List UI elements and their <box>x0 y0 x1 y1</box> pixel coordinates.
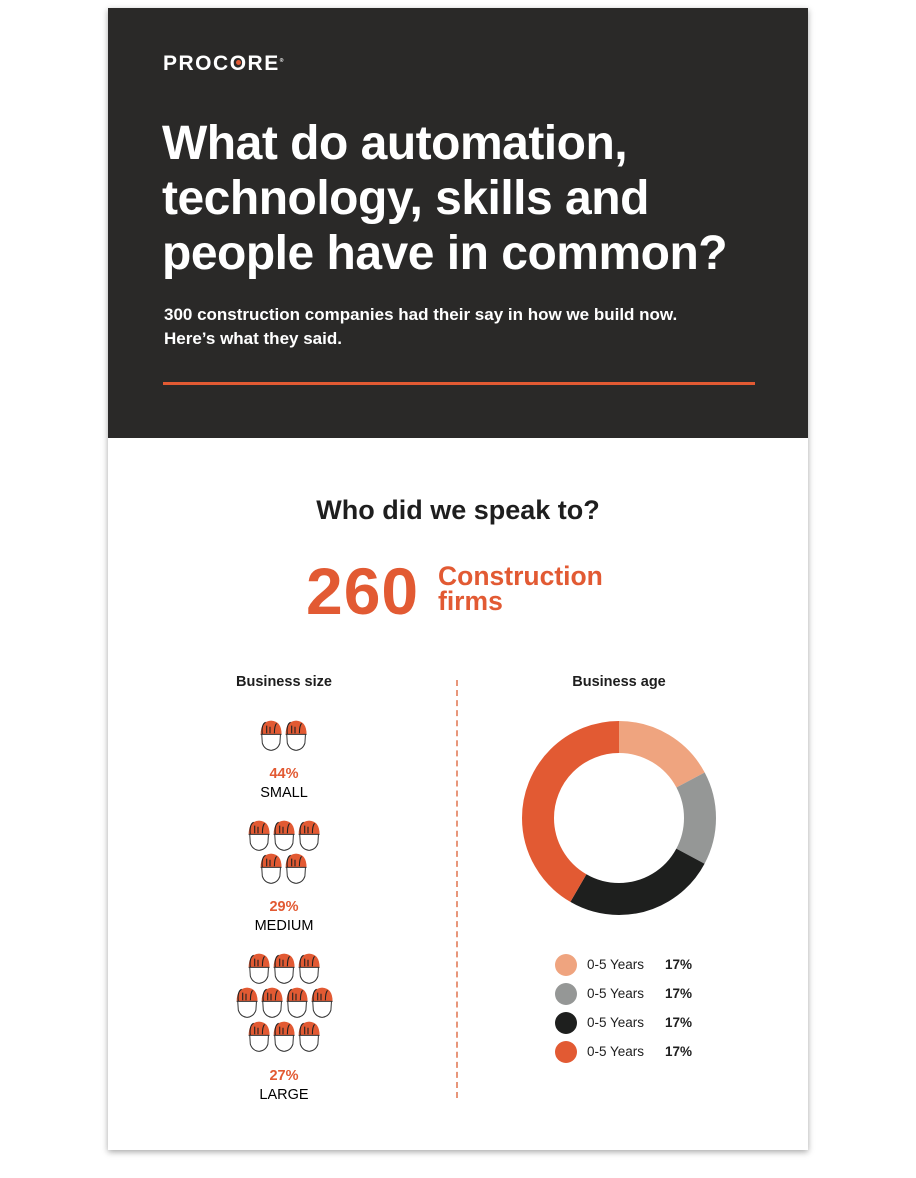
donut chart <box>522 721 716 915</box>
legend: 17% <box>665 1044 692 1059</box>
header panel <box>108 8 808 438</box>
divider <box>163 382 755 385</box>
panel: business size: LARGE <box>259 1087 309 1103</box>
legend: 17% <box>665 957 692 972</box>
title: What do automation, technology, skills and people have in common? <box>162 117 727 280</box>
logo: PROCORE® <box>163 52 285 75</box>
panel: business size: MEDIUM <box>255 918 313 934</box>
stat 260: Construction <box>438 561 603 591</box>
panel: business size: 44% <box>269 766 299 782</box>
legend: 0-5 Years <box>587 986 644 1001</box>
subtitle: Here’s what they said. <box>164 329 342 348</box>
helmet icons <box>236 720 333 1052</box>
panel: business size: SMALL <box>260 785 308 801</box>
stat 260: 260 <box>306 554 419 628</box>
panel: business size: Business size <box>236 674 332 690</box>
panel: business size: 29% <box>269 899 299 915</box>
panel: business age <box>522 674 716 1063</box>
panel: business size: 27% <box>269 1068 299 1084</box>
legend: 17% <box>665 986 692 1001</box>
legend: 0-5 Years <box>587 957 644 972</box>
panel: business size <box>236 674 333 1103</box>
legend: 0-5 Years <box>587 1044 644 1059</box>
subtitle <box>164 305 677 348</box>
section heading: Who did we speak to? <box>316 495 600 525</box>
card <box>108 8 808 1150</box>
stat 260: firms <box>438 586 503 616</box>
legend <box>555 954 692 1063</box>
subtitle: 300 construction companies had their say in how we build now. <box>164 305 677 324</box>
stat 260 <box>306 554 603 628</box>
panel: business age: Business age <box>572 674 666 690</box>
legend: 17% <box>665 1015 692 1030</box>
legend: 0-5 Years <box>587 1015 644 1030</box>
